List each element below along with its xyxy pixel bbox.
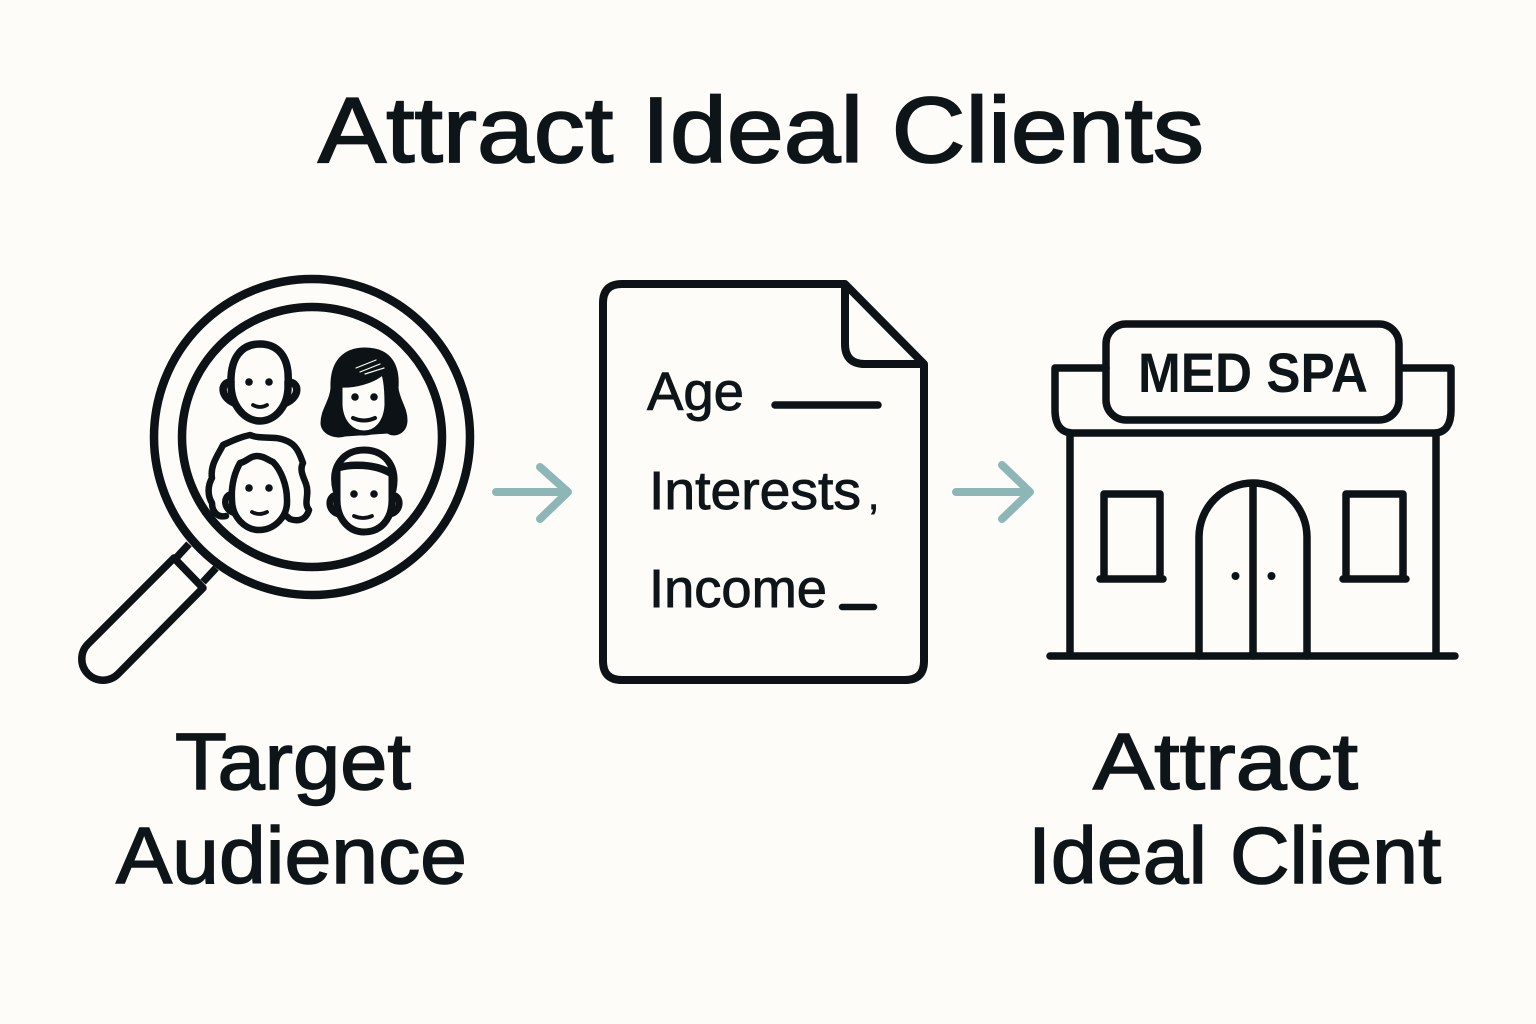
right window	[1343, 494, 1406, 579]
label: target audience: Target	[175, 717, 411, 806]
face: man with short hair	[330, 450, 399, 532]
left window	[1100, 494, 1163, 579]
face: woman with dark hair	[323, 350, 405, 435]
face: woman with curly hair	[209, 435, 309, 530]
arrow: audience to profile	[496, 467, 568, 519]
double door	[1199, 483, 1307, 656]
sign board	[1106, 324, 1399, 420]
magnifier lens rings	[154, 279, 470, 595]
label: attract ideal client: Attract	[1093, 717, 1358, 806]
icon: med spa storefront	[1050, 324, 1455, 656]
face: bald man	[223, 344, 297, 421]
label: attract ideal client	[1028, 717, 1441, 900]
roof	[1055, 368, 1451, 433]
field: income: Income	[649, 559, 827, 619]
label: target audience: Audience	[116, 811, 467, 900]
field: interests: Interests	[649, 461, 861, 521]
icon: magnifying glass with four faces	[82, 279, 470, 680]
walls and ground	[1050, 433, 1455, 656]
label: target audience	[116, 717, 467, 900]
comma: ,	[868, 474, 879, 518]
document outline with folded corner	[603, 284, 924, 680]
document: client profile	[603, 284, 924, 680]
field: age: Age	[647, 362, 744, 422]
sign board: MED SPA	[1138, 341, 1368, 404]
label: attract ideal client: Ideal Client	[1028, 811, 1441, 900]
arrow: profile to client	[956, 465, 1030, 519]
magnifier handle	[82, 544, 216, 680]
title: Attract Ideal Clients	[318, 78, 1204, 182]
